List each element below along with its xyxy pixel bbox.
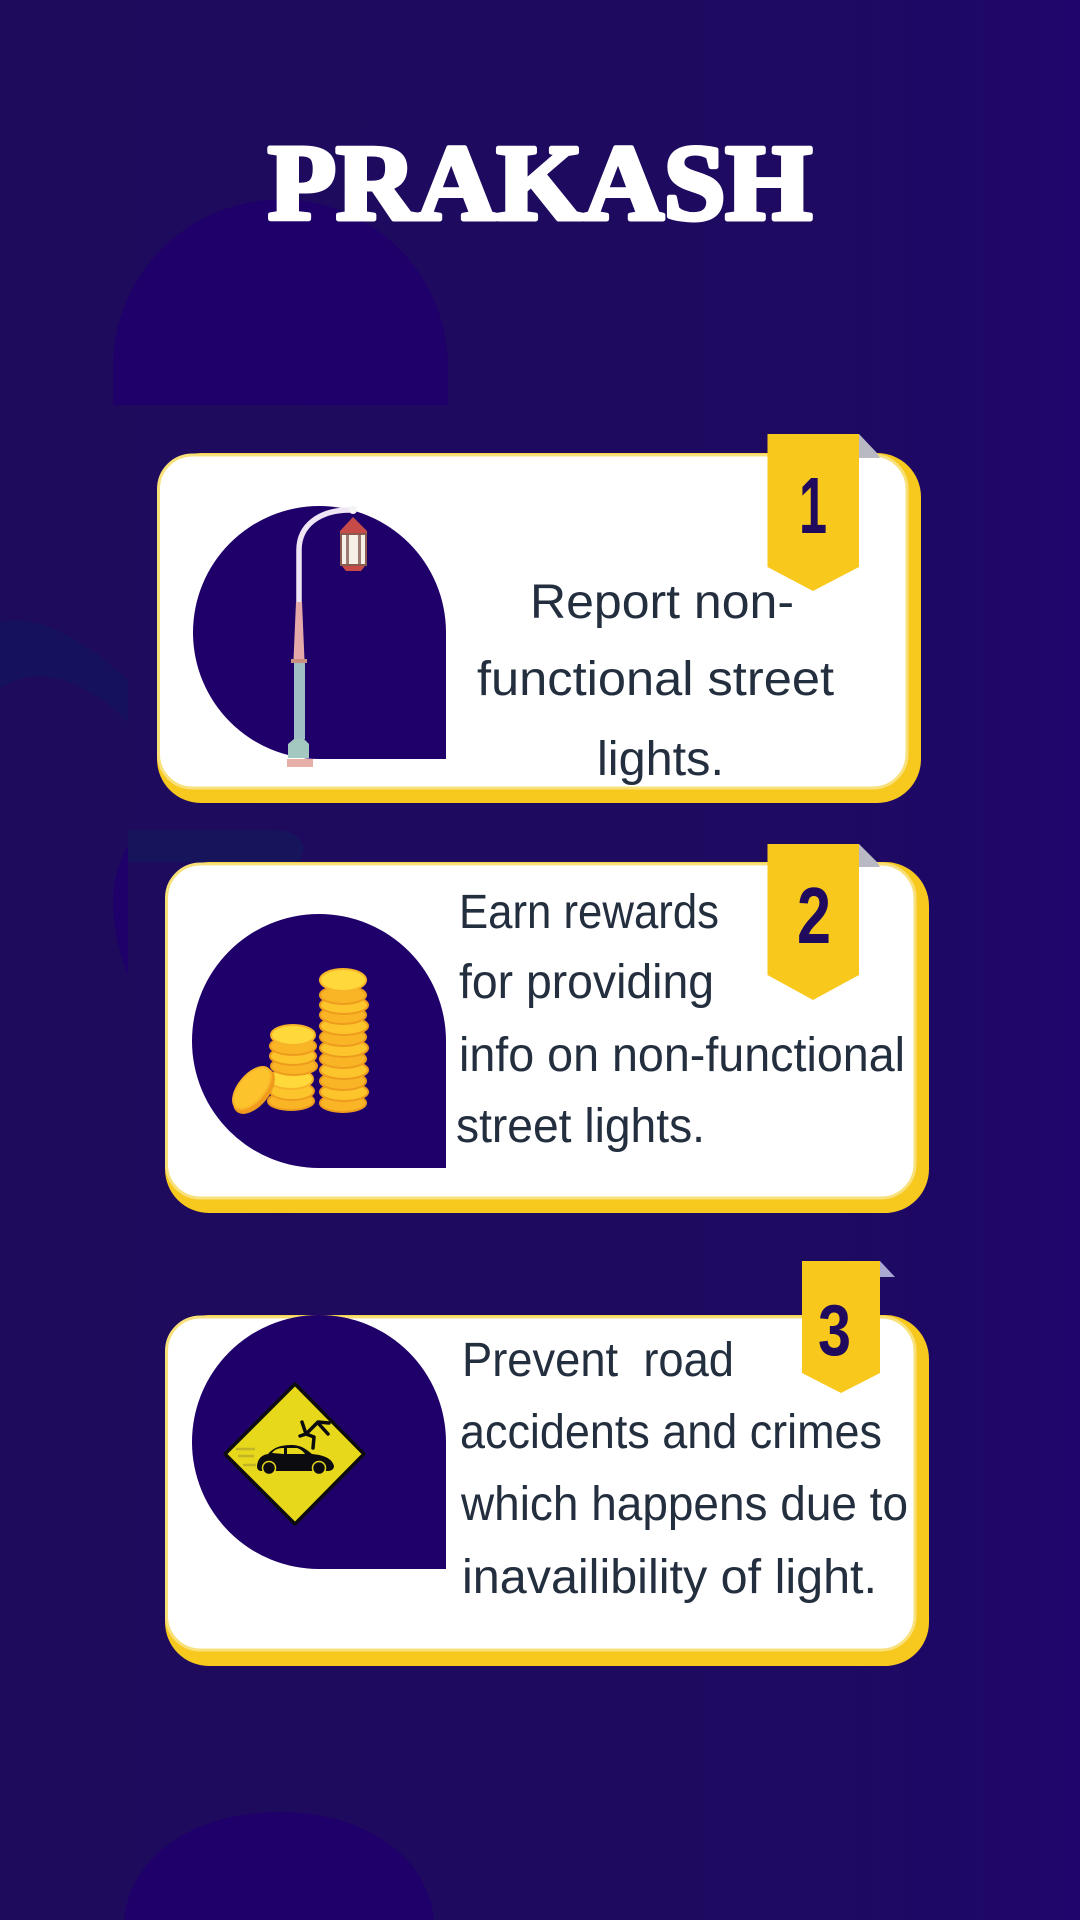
icon: accident warning sign [225, 1384, 364, 1524]
text block 1 [477, 576, 834, 786]
ribbon badge 3 [802, 1261, 895, 1393]
ribbon badge 3: 3 [818, 1291, 851, 1371]
text block 3 [460, 1334, 908, 1604]
title: PRAKASH [268, 124, 812, 243]
text block 2: Earn rewards [459, 886, 719, 939]
ribbon badge 2: 2 [797, 871, 831, 960]
text block 1: Report non- [530, 576, 794, 629]
card frame 2 [165, 862, 929, 1213]
text block 1: functional street [477, 653, 834, 706]
card frame 1 [157, 453, 921, 803]
text block 3: Prevent road [462, 1334, 734, 1387]
panel: step 2 rewards [165, 844, 929, 1213]
icon: coin stacks [226, 969, 368, 1120]
text block 2: for providing [459, 956, 714, 1009]
text block 2: info on non-functional [459, 1029, 905, 1082]
card frame 3 [165, 1315, 929, 1666]
text block 2 [456, 886, 905, 1153]
icon: street lamp [287, 506, 367, 767]
ribbon badge 1 [768, 434, 880, 591]
panel: step 3 prevent [165, 1261, 929, 1666]
text block 2: street lights. [456, 1100, 705, 1153]
text block 3: inavailibility of light. [462, 1551, 877, 1604]
icon background 1 [193, 506, 446, 759]
text block 3: accidents and crimes [460, 1406, 882, 1459]
text block 3: which happens due to [460, 1478, 908, 1531]
text block 1: lights. [597, 733, 724, 786]
panel: step 1 report [157, 434, 921, 803]
ribbon badge 1: 1 [799, 461, 827, 550]
ribbon badge 2 [768, 844, 880, 1000]
icon background 2 [192, 914, 446, 1168]
icon background 3 [192, 1315, 446, 1569]
